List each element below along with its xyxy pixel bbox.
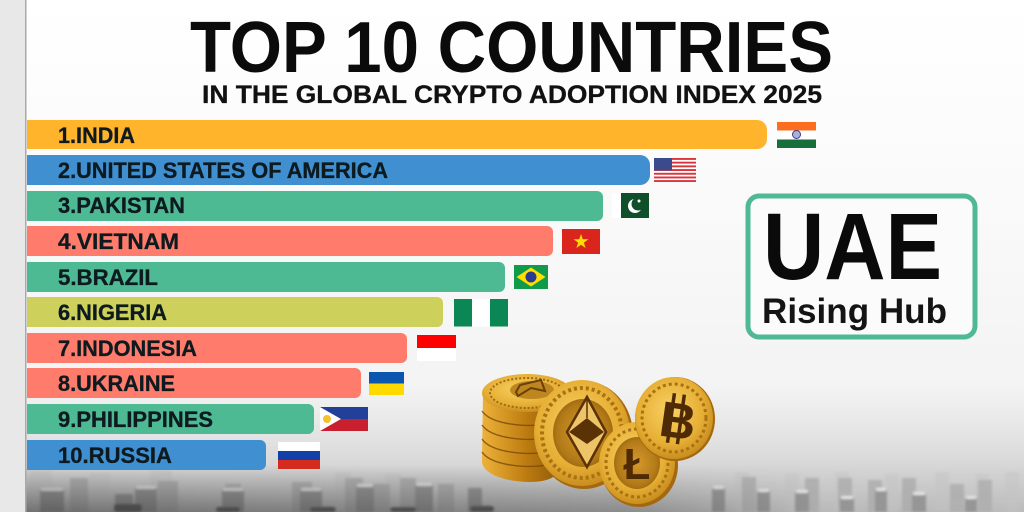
bar: United States of America: 2.UNITED STATES OF AMERICA	[58, 158, 388, 183]
bar: Russia: 10.RUSSIA	[58, 443, 172, 468]
flag: USA	[654, 158, 696, 182]
flag: Vietnam	[562, 229, 600, 254]
callout subtext: Rising Hub	[762, 292, 947, 331]
bar: Vietnam	[27, 226, 553, 256]
flag: Russia	[278, 442, 320, 469]
bar: Russia	[27, 440, 266, 470]
bar: Indonesia: 7.INDONESIA	[58, 336, 197, 361]
bitcoin symbol: B	[656, 391, 700, 451]
coins illustration	[482, 374, 715, 507]
flag: Indonesia	[417, 335, 456, 361]
bar: Nigeria: 6.NIGERIA	[58, 300, 167, 325]
bar: Philippines: 9.PHILIPPINES	[58, 407, 213, 432]
flag: Philippines	[320, 407, 368, 431]
bar: Pakistan: 3.PAKISTAN	[58, 193, 185, 218]
flag: Pakistan	[612, 193, 649, 218]
city skyline	[30, 470, 1019, 512]
title: TOP 10 COUNTRIES	[190, 8, 833, 88]
bar: Brazil	[27, 262, 505, 292]
coin stack	[482, 374, 572, 482]
bar: Nigeria	[27, 297, 443, 327]
callout: UAE Rising Hub	[748, 194, 975, 337]
subtitle: IN THE GLOBAL CRYPTO ADOPTION INDEX 2025	[202, 81, 822, 109]
left side strip	[0, 0, 26, 512]
bar: United States of America	[27, 155, 650, 185]
bar: Ukraine: 8.UKRAINE	[58, 371, 175, 396]
flag: India	[777, 122, 816, 148]
bar: India: 1.INDIA	[58, 123, 135, 148]
bar: Indonesia	[27, 333, 407, 363]
coin: Litecoin	[599, 422, 678, 507]
flag: Ukraine	[369, 372, 404, 395]
coin: Ethereum	[534, 380, 633, 489]
bar chart	[27, 120, 767, 470]
flag: Brazil	[514, 265, 548, 289]
bar: Philippines	[27, 404, 314, 434]
callout headline: UAE	[763, 194, 942, 300]
bar: Vietnam: 4.VIETNAM	[58, 229, 179, 254]
bar: Ukraine	[27, 368, 361, 398]
bar: Brazil: 5.BRAZIL	[58, 265, 158, 290]
bar: India	[27, 120, 767, 149]
bar: Pakistan	[27, 191, 603, 221]
coin: Bitcoin	[635, 377, 715, 461]
litecoin symbol: Ł	[624, 440, 650, 489]
flag: Nigeria	[454, 299, 508, 326]
